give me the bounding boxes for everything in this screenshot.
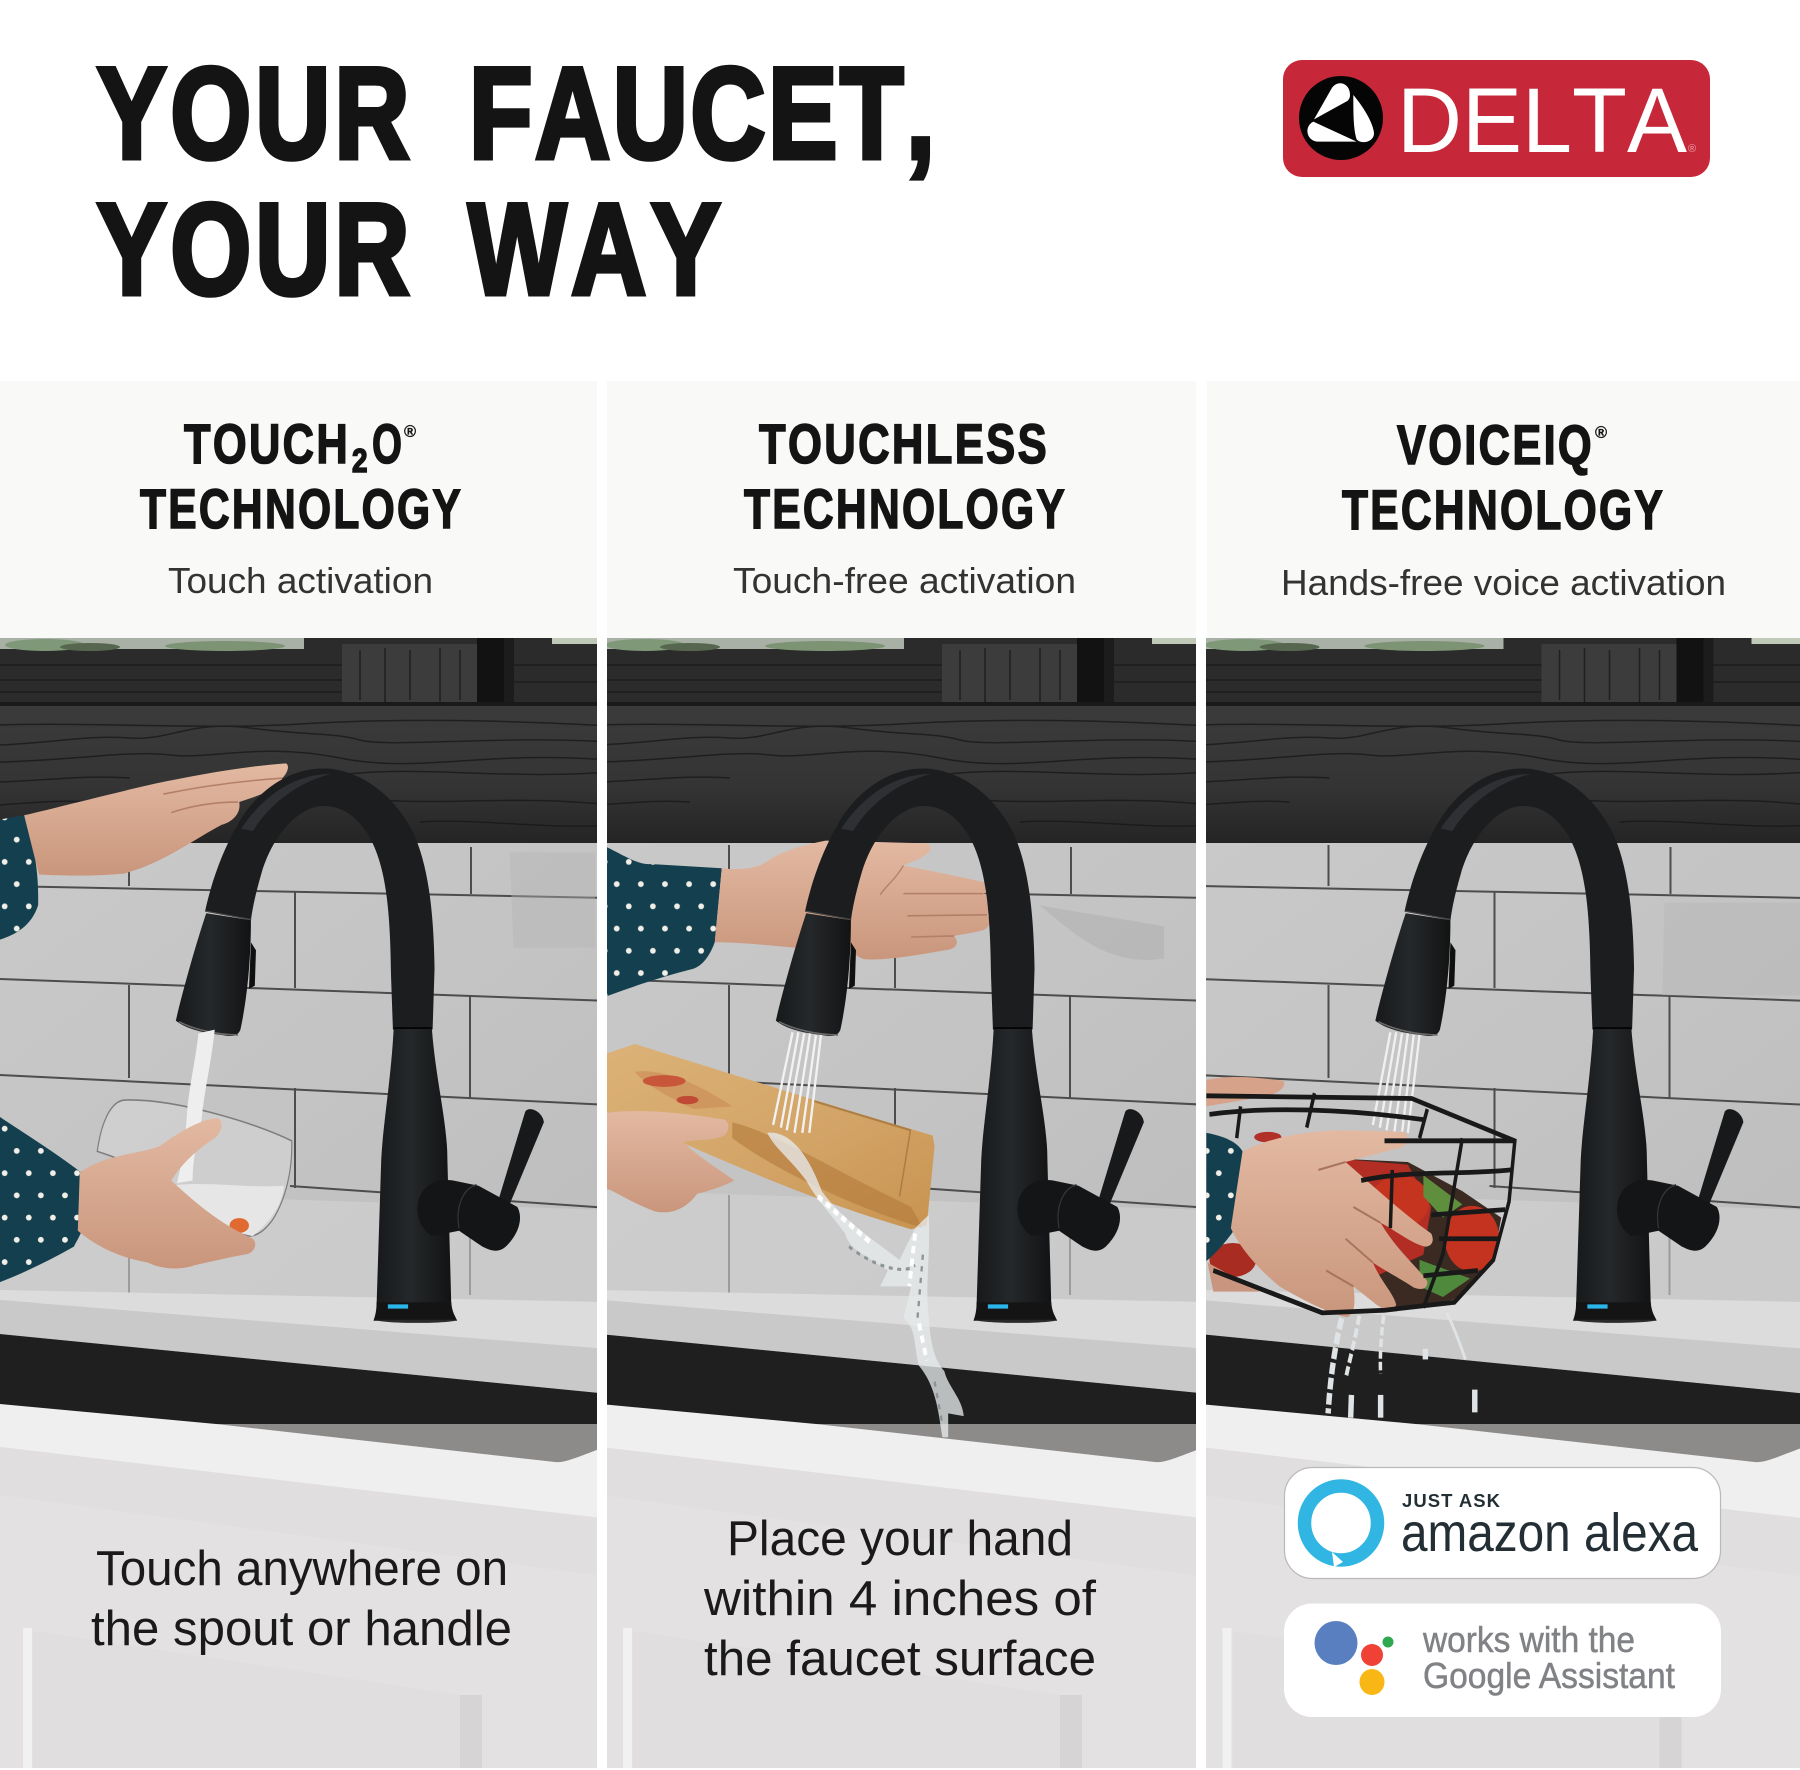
logo: Delta: ® bbox=[1688, 143, 1696, 155]
subheading: Touch activation bbox=[168, 560, 433, 601]
tile reflection bbox=[511, 895, 596, 899]
icon: Google Assistant dots bbox=[1314, 1621, 1394, 1695]
back hand bbox=[1206, 1077, 1284, 1106]
water splash bbox=[767, 1133, 964, 1437]
subheading: Touch-free activation bbox=[733, 560, 1076, 601]
caption: touchless: the faucet surface bbox=[704, 1632, 1096, 1686]
title: FAUCET, bbox=[469, 40, 938, 186]
water drips bbox=[1328, 1313, 1475, 1418]
water stream bbox=[1373, 1032, 1420, 1133]
heading: Touch2O technology: TECHNOLOGY bbox=[140, 477, 463, 540]
badge: Amazon Alexa bbox=[1284, 1468, 1720, 1578]
badge: Amazon Alexa: JUST ASK bbox=[1402, 1490, 1501, 1511]
lower sleeve bbox=[0, 1117, 81, 1282]
hand under board bbox=[607, 1111, 734, 1212]
caption: touch: Touch anywhere on bbox=[96, 1542, 508, 1596]
faucet bbox=[776, 768, 1144, 1323]
faucet bbox=[1375, 768, 1743, 1323]
heading: Touchless technology: TECHNOLOGY bbox=[744, 477, 1067, 540]
title: WAY bbox=[468, 176, 725, 322]
tile reflection bbox=[1040, 905, 1164, 960]
water streams bbox=[773, 1032, 821, 1133]
caption: touch: the spout or handle bbox=[91, 1602, 512, 1656]
tile reflection bbox=[1662, 994, 1678, 996]
caption: touchless: within 4 inches of bbox=[703, 1572, 1096, 1626]
title: YOUR bbox=[97, 176, 413, 322]
panel: Touchless header bbox=[607, 381, 1196, 639]
caption: touchless: Place your hand bbox=[727, 1512, 1073, 1566]
lower hand edge bbox=[1208, 1263, 1260, 1292]
heading: Touch2O technology: O bbox=[372, 412, 404, 475]
badge: Google Assistant: Google Assistant bbox=[1423, 1655, 1675, 1696]
sleeve: upper arm bbox=[0, 815, 38, 940]
heading: VoiceIQ technology: VOICEIQ bbox=[1397, 413, 1594, 476]
glass bowl bbox=[97, 1100, 292, 1236]
panel: VoiceIQ header bbox=[1207, 381, 1800, 639]
title bbox=[97, 40, 938, 322]
logo: Delta bbox=[1283, 60, 1710, 177]
sleeve bbox=[1206, 1132, 1242, 1261]
heading: Touch2O technology: TOUCH bbox=[184, 412, 350, 475]
heading: Touchless technology: TOUCHLESS bbox=[759, 412, 1049, 475]
panel: VoiceIQ photo scene bbox=[1200, 638, 1800, 1770]
hand holding bowl bbox=[78, 1118, 255, 1268]
panel: Touchless photo scene bbox=[600, 638, 1210, 1770]
water stream bbox=[177, 1030, 215, 1183]
badge: Google Assistant: works with the bbox=[1422, 1619, 1635, 1660]
hand hovering behind spout bbox=[715, 841, 1001, 959]
badge: Amazon Alexa: amazon alexa bbox=[1401, 1503, 1699, 1563]
caption: touchless bbox=[703, 1512, 1096, 1686]
title: YOUR bbox=[97, 40, 413, 186]
heading: Touch2O technology: ® bbox=[404, 422, 419, 441]
heading: VoiceIQ technology bbox=[1342, 413, 1665, 541]
caption: touch bbox=[91, 1542, 512, 1656]
heading: Touch2O technology bbox=[140, 412, 463, 540]
cutting board bbox=[607, 1044, 935, 1229]
logo: Delta: DELTA bbox=[1397, 70, 1688, 172]
badge: Google Assistant bbox=[1284, 1604, 1721, 1717]
heading: VoiceIQ technology: TECHNOLOGY bbox=[1342, 478, 1665, 541]
faucet bbox=[176, 768, 544, 1323]
sleeve bbox=[607, 847, 722, 996]
panel: Touch photo scene bbox=[0, 638, 610, 1770]
heading: Touch2O technology: 2 bbox=[352, 442, 370, 479]
heading: VoiceIQ technology: ® bbox=[1595, 423, 1610, 442]
wire basket bbox=[1206, 1093, 1515, 1313]
icon: Alexa ring bbox=[1304, 1486, 1378, 1567]
hand holding basket bbox=[1231, 1130, 1433, 1317]
subheading: Hands-free voice activation bbox=[1281, 562, 1726, 603]
panel: Touch2O header bbox=[0, 381, 597, 639]
strawberries and basket interior bbox=[1209, 1132, 1501, 1310]
icon: Delta triangle mark bbox=[1307, 83, 1374, 142]
heading: Touchless technology bbox=[744, 412, 1067, 540]
water in bowl bbox=[171, 1184, 284, 1236]
hand touching spout bbox=[24, 763, 288, 876]
